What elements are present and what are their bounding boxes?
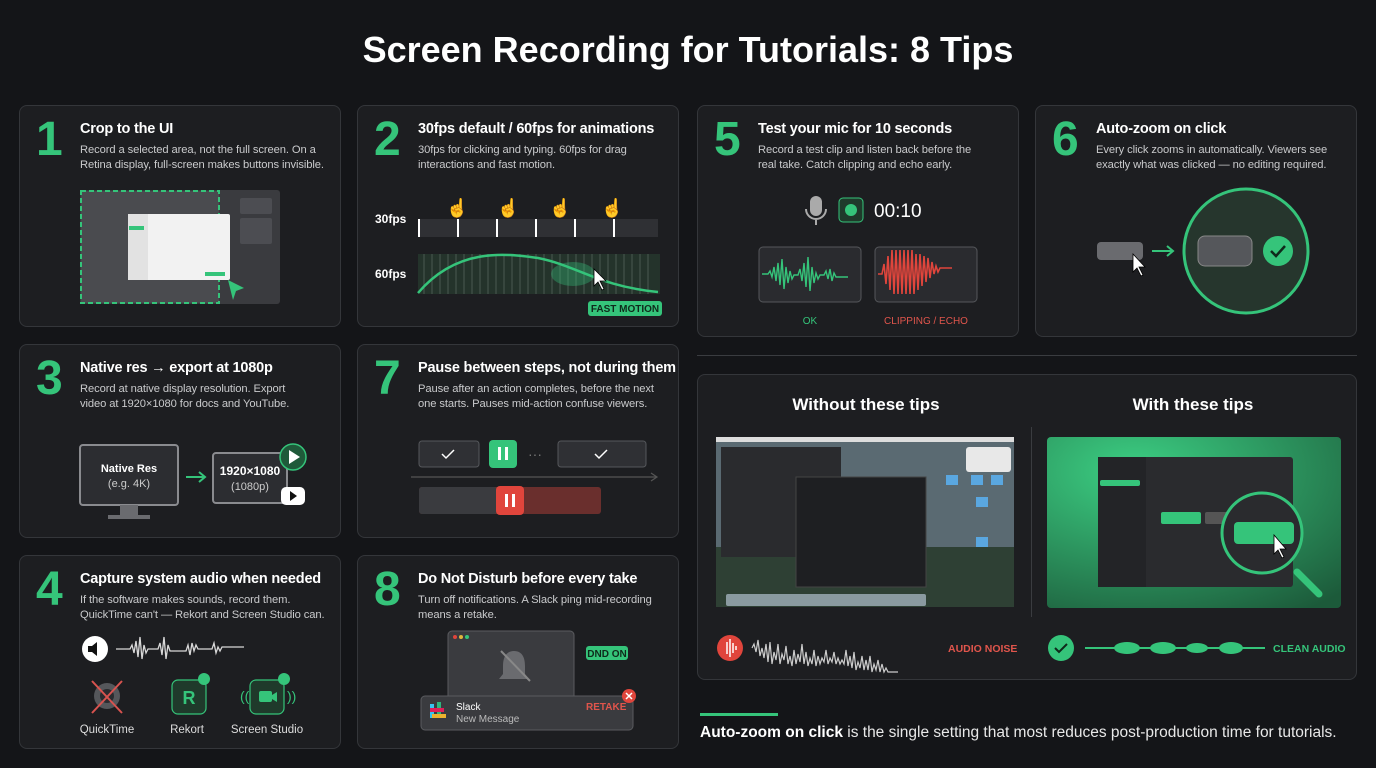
heading: without: Without these tips <box>792 395 940 414</box>
audio noise: AUDIO NOISE <box>948 643 1017 655</box>
heading 5: Test your mic for 10 seconds <box>758 121 952 137</box>
illustration: cropped screen <box>80 190 280 304</box>
text 8 <box>418 594 652 621</box>
heading 4: Capture system audio when needed <box>80 571 321 587</box>
text 7 <box>418 383 654 410</box>
resolution diagram: Native Res <box>101 463 157 475</box>
heading 1: Crop to the UI <box>80 121 173 137</box>
heading 7: Pause between steps, not during them <box>418 360 676 376</box>
resolution diagram: (1080p) <box>231 481 269 493</box>
text 1: Retina display, full-screen makes buttons invisible. <box>80 159 324 171</box>
panel: comparison <box>697 374 1357 680</box>
audio noise <box>717 635 1017 674</box>
heading: with: With these tips <box>1133 395 1253 414</box>
panel: tip 6: 6 <box>1052 113 1079 166</box>
text 4 <box>80 594 325 621</box>
audio and app icons <box>80 636 303 736</box>
resolution diagram: 1920×1080 <box>220 464 281 478</box>
audio and app icons: R <box>182 688 196 708</box>
clean audio: CLEAN AUDIO <box>1273 643 1346 655</box>
panel: tip 2 <box>357 105 679 327</box>
panel: tip 8 <box>357 555 679 749</box>
text 1 <box>80 144 324 171</box>
screenshot: clean zoomed <box>1047 437 1341 608</box>
fps chart: ☝ <box>549 197 571 219</box>
text 8: means a retake. <box>418 609 497 621</box>
text 6: exactly what was clicked — no editing required. <box>1096 159 1326 171</box>
text 5: real take. Catch clipping and echo early. <box>758 159 952 171</box>
panel: tip 5 <box>697 105 1019 337</box>
text 6: Every click zooms in automatically. Viewers see <box>1096 144 1327 156</box>
fps chart: ☝ <box>446 197 468 219</box>
vertical divider <box>1031 427 1032 617</box>
panel: tip 7 <box>357 344 679 538</box>
panel: tip 3: 3 <box>36 352 63 405</box>
fps chart: 30fps <box>375 212 407 226</box>
panel: tip 6 <box>1035 105 1357 337</box>
text 4: QuickTime can't — Rekort and Screen Studio can. <box>80 609 325 621</box>
panel: tip 4 <box>19 555 341 749</box>
text 6 <box>1096 144 1327 171</box>
DND illustration: New Message <box>456 714 520 725</box>
text 1: Record a selected area, not the full screen. On a <box>80 144 316 156</box>
divider <box>697 355 1357 356</box>
DND illustration: DND ON <box>587 649 627 660</box>
mic test <box>758 196 978 327</box>
text 7: Pause after an action completes, before the next <box>418 383 654 395</box>
fps chart: ☝ <box>601 197 623 219</box>
mic test: 00:10 <box>874 201 922 222</box>
panel: tip 7: 7 <box>374 352 401 405</box>
text 2: interactions and fast motion. <box>418 159 555 171</box>
audio and app icons: QuickTime <box>80 724 134 736</box>
audio and app icons: Screen Studio <box>231 724 303 736</box>
fps chart: ☝ <box>497 197 519 219</box>
clean audio <box>1048 635 1346 661</box>
text 8: Turn off notifications. A Slack ping mid-recording <box>418 594 652 606</box>
resolution diagram <box>79 443 307 519</box>
zoom illustration <box>1097 188 1310 314</box>
text 3 <box>80 383 289 410</box>
text 3: Record at native display resolution. Export <box>80 383 285 395</box>
fps chart: FAST MOTION <box>591 304 659 315</box>
heading 8: Do Not Disturb before every take <box>418 571 637 587</box>
audio and app icons: )) <box>287 688 296 704</box>
resolution diagram: (e.g. 4K) <box>108 478 150 490</box>
heading 2: 30fps default / 60fps for animations <box>418 121 654 137</box>
DND illustration: RETAKE <box>586 702 627 713</box>
panel: tip 5: 5 <box>714 113 741 166</box>
text 2 <box>418 144 627 171</box>
DND illustration <box>420 630 636 730</box>
fps chart <box>375 197 662 316</box>
audio and app icons: (( <box>240 688 250 704</box>
heading 3: Native res → export at 1080p <box>80 360 273 376</box>
title: Screen Recording for Tutorials: 8 Tips <box>363 29 1013 70</box>
panel: tip 4: 4 <box>36 563 63 616</box>
text 2: 30fps for clicking and typing. 60fps for drag <box>418 144 627 156</box>
text 7: one starts. Pauses mid-action confuse viewers. <box>418 398 647 410</box>
mic test: OK <box>803 316 818 327</box>
text 5: Record a test clip and listen back before the <box>758 144 971 156</box>
accent line <box>700 713 778 716</box>
heading 6: Auto-zoom on click <box>1096 121 1226 137</box>
text 4: If the software makes sounds, record them. <box>80 594 290 606</box>
panel: tip 1 <box>19 105 341 327</box>
pause timeline <box>411 440 658 515</box>
panel: tip 2: 2 <box>374 113 401 166</box>
mic test: CLIPPING / ECHO <box>884 316 968 327</box>
panel: tip 3 <box>19 344 341 538</box>
panel: tip 1: 1 <box>36 113 63 166</box>
fps chart: 60fps <box>375 267 407 281</box>
text 3: video at 1920×1080 for docs and YouTube. <box>80 398 289 410</box>
panel: tip 8: 8 <box>374 563 401 616</box>
takeaway text: Auto-zoom on click is the single setting that most reduces post-production time for tutorials. <box>700 724 1337 741</box>
screenshot: cluttered desktop <box>716 437 1014 607</box>
audio and app icons: Rekort <box>170 724 205 736</box>
DND illustration: Slack <box>456 702 481 713</box>
text 5 <box>758 144 971 171</box>
pause timeline: ··· <box>528 446 542 462</box>
